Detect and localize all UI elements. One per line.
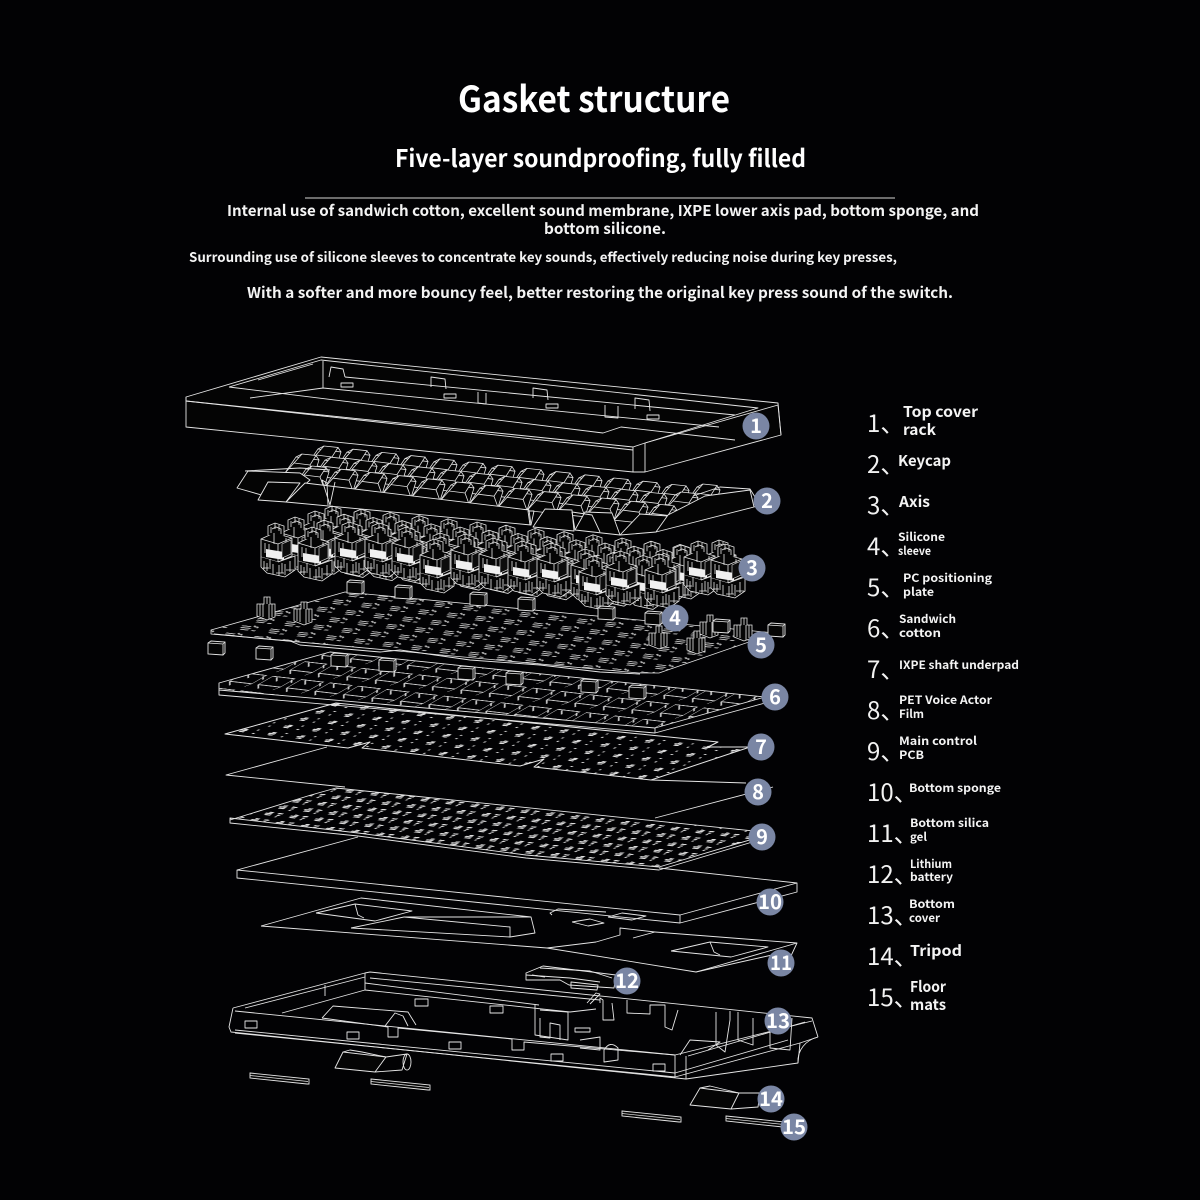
legend item 10: Bottom sponge — [909, 780, 1001, 796]
layer 12: lithium battery — [526, 966, 616, 1004]
legend item 6: cotton — [899, 625, 941, 641]
badge 8 — [744, 776, 772, 806]
badge 13: 13 — [766, 1005, 790, 1034]
badge 3: 3 — [746, 552, 758, 581]
layer 14: tripod feet — [335, 1050, 760, 1109]
legend item 5: 5、 — [867, 568, 904, 603]
badge 5: 5 — [755, 629, 767, 658]
legend item 15 — [867, 976, 946, 1015]
legend item 5: plate — [903, 584, 934, 600]
legend item 3: Axis — [898, 491, 930, 512]
subtitle: Five-layer soundproofing, fully filled — [395, 139, 806, 174]
legend item 14: Tripod — [910, 940, 962, 961]
badge 12: 12 — [615, 965, 639, 994]
description text block: With a softer and more bouncy feel, better restoring the original key press sound of the switch. — [247, 282, 953, 303]
legend item 10 — [867, 773, 1001, 808]
badge 5 — [748, 629, 774, 658]
badge 15: 15 — [782, 1111, 806, 1140]
legend item 13: Bottom — [909, 896, 955, 912]
legend item 13: cover — [909, 910, 941, 926]
legend item 1: rack — [903, 419, 936, 440]
legend item 6 — [867, 609, 956, 644]
parts legend — [867, 401, 1019, 1015]
badge 6 — [762, 681, 788, 710]
badge 4: 4 — [669, 602, 681, 631]
legend item 6: 6、 — [867, 609, 904, 644]
title: Gasket structure — [458, 71, 730, 123]
legend item 11: gel — [910, 829, 927, 845]
badge 6: 6 — [769, 681, 781, 710]
legend item 11: Bottom silica — [910, 815, 989, 831]
badge 2: 2 — [761, 485, 773, 514]
layer 2: keycaps — [237, 446, 760, 535]
badge 1 — [742, 410, 770, 440]
legend item 8: Film — [899, 706, 924, 722]
layer 10: bottom sponge — [237, 837, 797, 926]
legend item 5: PC positioning — [903, 570, 992, 586]
legend item 12: 12、 — [867, 855, 918, 890]
description text block — [189, 200, 979, 303]
badge 3 — [738, 552, 766, 582]
layer 9: main control PCB — [230, 788, 773, 870]
badge 7 — [748, 731, 774, 760]
legend item 15: Floor — [910, 976, 946, 997]
legend item 11: 11、 — [867, 814, 918, 849]
description text block: Surrounding use of silicone sleeves to concentrate key sounds, effectively reducing noise during key presses, — [189, 246, 897, 266]
description text block: bottom silicone. — [544, 218, 666, 239]
legend item 3: 3、 — [867, 486, 904, 521]
legend item 2: 2、 — [867, 445, 904, 480]
layer 11: bottom silica gel — [261, 898, 797, 972]
legend item 12: Lithium — [910, 856, 952, 872]
legend item 3 — [867, 486, 930, 521]
layer 4: silicone sleeves — [208, 580, 785, 660]
badge 11: 11 — [770, 947, 792, 976]
badge 9: 9 — [756, 821, 768, 850]
legend item 8: 8、 — [867, 691, 904, 726]
layer 6: sandwich cotton — [219, 652, 765, 733]
legend item 5 — [867, 568, 992, 603]
legend item 8 — [867, 691, 993, 726]
numbered callout badges — [614, 410, 808, 1140]
description text block: Internal use of sandwich cotton, excellent sound membrane, IXPE lower axis pad, bottom sponge, and — [227, 200, 979, 221]
badge 14: 14 — [759, 1083, 783, 1112]
layer 15: floor mats — [250, 1073, 785, 1127]
badge 10: 10 — [758, 886, 782, 915]
legend item 1 — [867, 401, 978, 440]
layer 13: bottom cover — [229, 972, 818, 1079]
legend item 1: Top cover — [903, 401, 978, 422]
legend item 15: 15、 — [867, 978, 918, 1013]
badge 8: 8 — [752, 776, 764, 805]
exploded keyboard diagram — [186, 357, 818, 1127]
legend item 6: Sandwich — [899, 611, 956, 627]
legend item 9 — [867, 732, 977, 767]
badge 9 — [748, 821, 776, 850]
layer 8: PET film — [226, 747, 773, 818]
legend item 10: 10、 — [867, 773, 918, 808]
badge 7: 7 — [755, 731, 767, 760]
legend item 13: 13、 — [867, 896, 918, 931]
layer 3: axis switches — [261, 506, 745, 610]
legend item 4: Silicone — [898, 529, 945, 545]
legend item 2: Keycap — [898, 450, 951, 471]
legend item 12 — [867, 855, 953, 890]
layer 7: IXPE shaft underpad — [225, 703, 750, 780]
legend item 7: IXPE shaft underpad — [899, 657, 1019, 673]
badge 1: 1 — [750, 410, 762, 439]
legend item 11 — [867, 814, 989, 849]
layer 1: top cover rack — [186, 357, 781, 472]
badge 4 — [662, 602, 688, 632]
legend item 7 — [867, 650, 1019, 685]
legend item 1: 1、 — [867, 404, 904, 439]
legend item 14 — [867, 937, 962, 972]
legend item 9: 9、 — [867, 732, 904, 767]
legend item 15: mats — [910, 994, 946, 1015]
legend item 9: PCB — [899, 747, 924, 763]
legend item 9: Main control — [899, 733, 977, 749]
badge 2 — [754, 485, 780, 514]
legend item 4: 4、 — [867, 527, 904, 562]
legend item 12: battery — [910, 869, 953, 885]
legend item 13 — [867, 896, 955, 931]
legend item 7: 7、 — [867, 650, 904, 685]
legend item 8: PET Voice Actor — [899, 692, 993, 708]
legend item 4: sleeve — [898, 543, 931, 559]
legend item 4 — [867, 527, 945, 562]
legend item 2 — [867, 445, 951, 480]
layer 5: PC positioning plate — [211, 592, 775, 674]
legend item 14: 14、 — [867, 937, 918, 972]
